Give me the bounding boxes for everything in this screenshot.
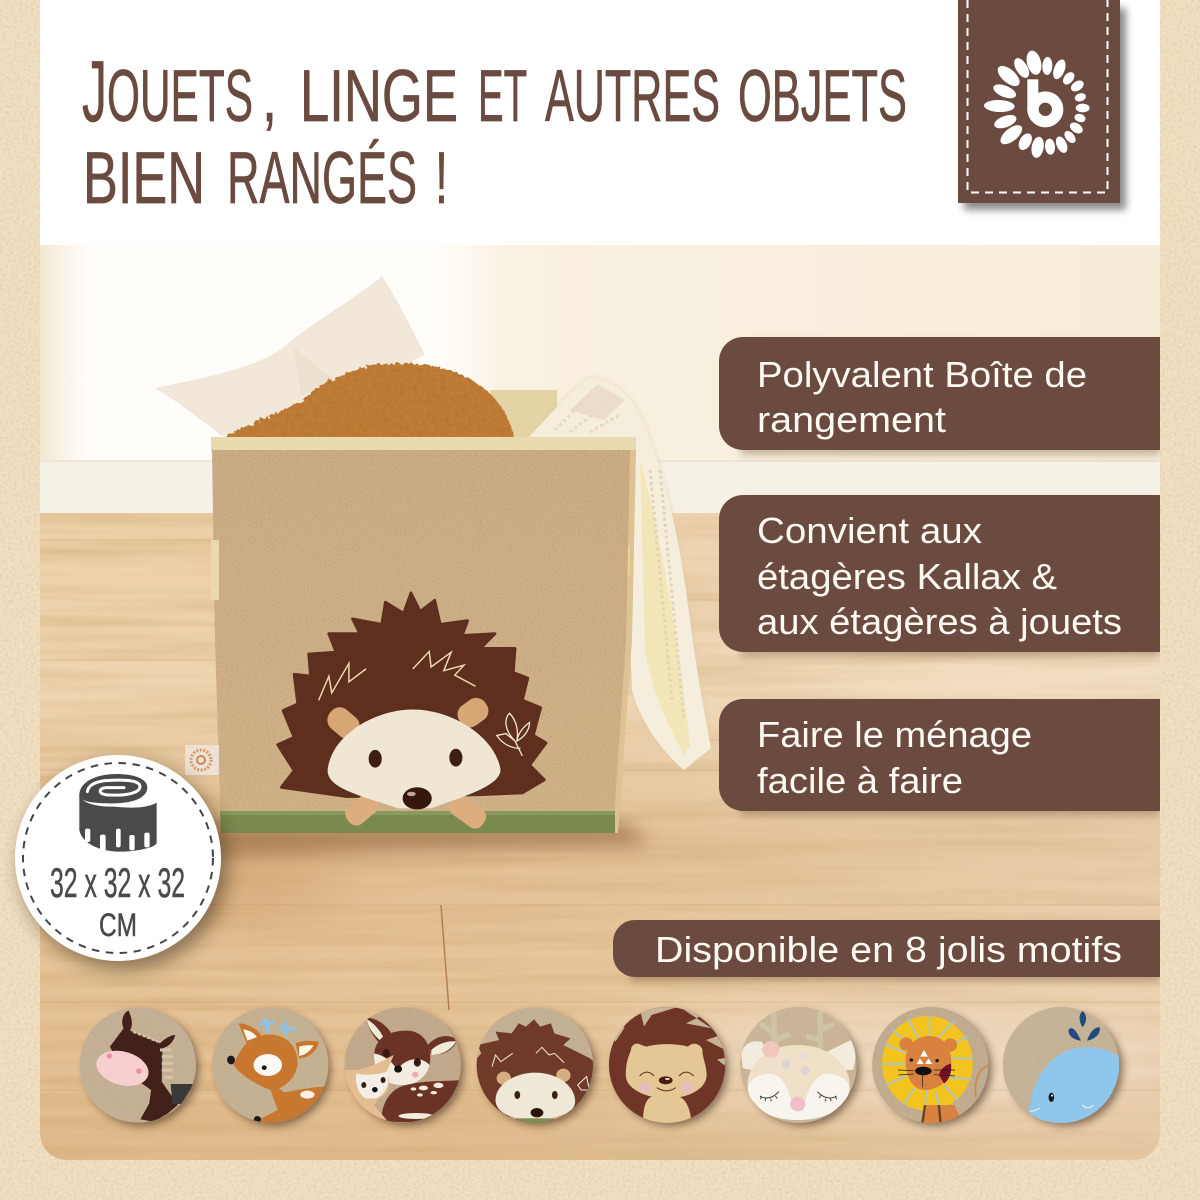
swatch: fawn family [342,1007,463,1123]
title: LINGE [300,56,458,137]
title: RANGÉS [227,138,417,219]
pillow [155,276,425,436]
box rim [211,437,636,452]
room wall [40,245,1160,460]
size badge [15,755,228,970]
swatch: horse [78,1007,199,1123]
feature pill 3: Faire le ménage [757,714,1032,755]
photo panel [10,245,1180,1163]
skirting board [40,460,1160,514]
swatch shadows [85,1012,1123,1126]
size badge: CM [99,907,137,943]
icon: measuring tape [79,774,157,852]
eyes and nose [369,750,382,768]
motif group two [605,1002,1121,1123]
icon: flower logo [984,49,1090,159]
title: OBJETS [738,56,907,137]
swatch: lion [870,1007,990,1123]
swatch: smiling hedgehog [605,1002,727,1123]
ears [327,707,360,738]
teddy cushion [222,363,515,440]
paws [345,796,380,826]
motifs heading pill [613,920,1160,982]
title [82,44,907,219]
motifs heading pill: Disponible en 8 jolis motifs [655,929,1122,970]
feature pill 3: facile à faire [757,760,963,801]
brand tag with logo [958,0,1126,210]
wooden floor [10,513,1180,1163]
swatch: pale deer [738,1007,861,1123]
title: ET [478,56,527,137]
hedgehog body [278,593,546,796]
quill stitches [319,651,476,700]
feature pill 2 [719,495,1160,657]
feature pill 2: étagères Kallax & [757,556,1057,597]
dimensions text: 32 x 32 x 32 [50,859,185,906]
white header band [40,0,1160,246]
title: , [262,56,277,137]
storage box with contents [155,276,711,833]
green ribbon [220,811,615,833]
title: BIEN [83,138,205,219]
title: JOUETS [82,44,253,140]
feature pill 2: Convient aux [757,510,982,551]
leaf [497,713,530,756]
feature pill 1 [719,337,1160,455]
face [328,710,500,808]
motif group one [78,1007,596,1125]
box side [615,450,636,833]
title: ! [435,138,448,219]
feature pill 1: Polyvalent Boîte de [757,354,1087,395]
title: AUTRES [545,56,720,137]
swatch: whale [1001,1007,1121,1123]
motif row [78,1002,1123,1126]
feature pill 2: aux étagères à jouets [757,601,1122,642]
box inner back [490,390,557,437]
knitted blanket [528,378,711,770]
box front [212,450,630,833]
feature pill 1: rangement [757,399,946,440]
hedgehog applique [278,593,546,832]
feature pill 3 [719,699,1160,816]
swatch: hedgehog [474,1007,596,1125]
box floor shadow [205,822,650,856]
swatch: orange fawn [210,1007,331,1123]
small fabric label [185,745,219,775]
